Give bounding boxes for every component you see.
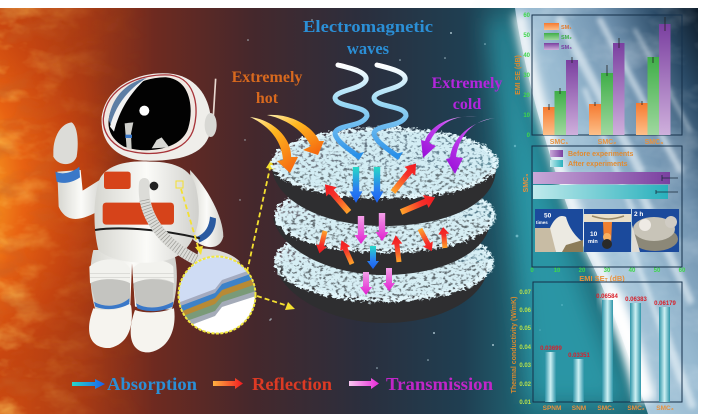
heading: extremely cold: cold <box>453 96 481 113</box>
y axis labels: 0.04 <box>519 345 532 351</box>
heading: extremely hot: Extremely <box>232 69 302 86</box>
astronaut <box>53 73 240 352</box>
heading: extremely hot <box>232 69 302 107</box>
heading: extremely hot: hot <box>256 90 279 107</box>
value labels: 0.03351 <box>568 353 590 359</box>
chest panels <box>104 172 131 189</box>
x axis: 30 <box>604 268 611 274</box>
x axis: 40 <box>629 268 636 274</box>
layered disc stack <box>271 127 499 323</box>
y axis labels: 50 <box>523 33 531 39</box>
chart: EMI SE by sample <box>515 13 682 146</box>
y axis labels: 40 <box>523 53 531 59</box>
hose <box>144 183 197 260</box>
y axis labels <box>519 290 532 406</box>
heading: extremely cold: Extremely <box>432 75 502 92</box>
photo: 50 times bending: 50 <box>544 212 552 220</box>
y axis title: EMI SE (dB) <box>515 55 522 95</box>
y label: SMC₃ <box>523 174 530 192</box>
glove fold <box>197 248 240 263</box>
legend: After experiments <box>568 161 628 168</box>
x axis labels: SMC₁ <box>597 405 615 412</box>
y axis labels: 60 <box>523 13 531 19</box>
x axis labels: SNM <box>572 405 586 412</box>
top disc <box>272 168 496 226</box>
horizontal bars <box>533 172 678 199</box>
x axis title: (dB) <box>608 274 625 283</box>
y axis labels: 0.02 <box>519 382 532 388</box>
x axis: 10 <box>554 268 561 274</box>
waist line <box>95 228 200 238</box>
transmission arrows <box>354 213 395 295</box>
value labels <box>540 294 676 359</box>
photo: 2 h samples: 2 h <box>634 211 643 218</box>
boots <box>89 305 132 348</box>
bottom disc <box>274 262 488 323</box>
legend <box>72 374 493 394</box>
x axis <box>530 268 686 274</box>
x axis title: EMI SE <box>579 274 605 283</box>
x axis labels: SMC₃ <box>656 405 674 412</box>
middle disc <box>273 218 490 275</box>
value labels: 0.03699 <box>540 346 562 352</box>
legs <box>90 250 177 313</box>
photo: 2 h samples <box>632 209 679 252</box>
chart: EMI SE before and after experiments <box>523 146 686 284</box>
y axis labels: 0.01 <box>519 400 532 406</box>
dashed callout arrows <box>176 160 295 310</box>
helmet <box>102 73 211 161</box>
x axis labels: SMC₃ <box>645 139 663 146</box>
legend <box>550 150 633 168</box>
y axis labels: 0.05 <box>519 326 532 332</box>
heading: electromagnetic waves <box>303 17 433 58</box>
photo: 50 times bending <box>535 209 583 252</box>
far arm <box>190 170 223 247</box>
x axis labels: SMC₂ <box>598 139 616 146</box>
extremely hot arrows <box>250 115 324 173</box>
visor reflection <box>109 78 147 128</box>
value labels: 0.06383 <box>625 297 648 303</box>
electromagnetic wave arrows <box>335 65 406 160</box>
x axis: 60 <box>679 268 686 274</box>
waving arm <box>57 170 105 219</box>
photo: 10 min flame <box>584 209 631 252</box>
y axis labels: 0.07 <box>519 290 532 296</box>
x axis: 0 <box>530 268 534 274</box>
value labels: 0.06584 <box>596 294 618 300</box>
y axis labels <box>523 13 531 139</box>
legend: absorption: Absorption <box>107 374 197 394</box>
cylinders <box>545 300 670 402</box>
legend: SM₂ <box>561 35 572 41</box>
photo: 10 min flame: min <box>588 239 598 245</box>
extremely cold arrows <box>421 116 495 174</box>
bars <box>543 24 670 135</box>
visor <box>108 77 191 150</box>
torso <box>94 161 199 263</box>
heading: extremely cold <box>432 75 502 113</box>
legend <box>544 23 572 51</box>
y axis labels: 0.03 <box>519 363 532 369</box>
legend: absorption <box>72 374 197 394</box>
wrist band <box>55 167 80 183</box>
y axis labels: 0 <box>527 133 531 139</box>
x axis labels <box>543 405 674 412</box>
legend: reflection <box>213 374 332 394</box>
x axis: 50 <box>654 268 661 274</box>
x axis: 20 <box>579 268 586 274</box>
heading: electromagnetic waves: Electromagnetic <box>303 17 433 36</box>
x axis labels: SMC₁ <box>550 139 568 146</box>
antenna <box>213 79 216 117</box>
photo: 50 times bending: times <box>536 220 548 225</box>
x axis labels: SMC₂ <box>627 405 645 412</box>
x axis title: T <box>605 278 608 284</box>
photo: 10 min flame: 10 <box>590 231 598 238</box>
chart: thermal conductivity <box>511 282 682 412</box>
x axis labels: SPNM <box>543 405 561 412</box>
y axis title: Thermal conductivity (W/mK) <box>511 297 518 393</box>
y axis labels: 10 <box>523 113 531 119</box>
legend: SM₁ <box>561 25 572 31</box>
planet with bright limb <box>480 0 703 419</box>
reflection arrows <box>314 159 450 266</box>
material zoom lens <box>178 256 256 334</box>
legend: SM₃ <box>561 45 572 51</box>
glove <box>53 122 78 164</box>
stars <box>154 19 563 369</box>
x axis labels <box>550 139 663 146</box>
y axis labels: 30 <box>523 73 531 79</box>
absorption arrows <box>350 167 384 269</box>
y axis labels: 20 <box>523 93 531 99</box>
heading: electromagnetic waves: waves <box>347 39 390 58</box>
legend: reflection: Reflection <box>252 374 332 394</box>
error bars <box>549 17 665 110</box>
value labels: 0.06179 <box>654 301 676 307</box>
legend: transmission: Transmission <box>386 374 493 394</box>
y axis labels: 0.06 <box>519 308 532 314</box>
legend: Before experiments <box>568 151 633 158</box>
legend: transmission <box>349 374 493 394</box>
